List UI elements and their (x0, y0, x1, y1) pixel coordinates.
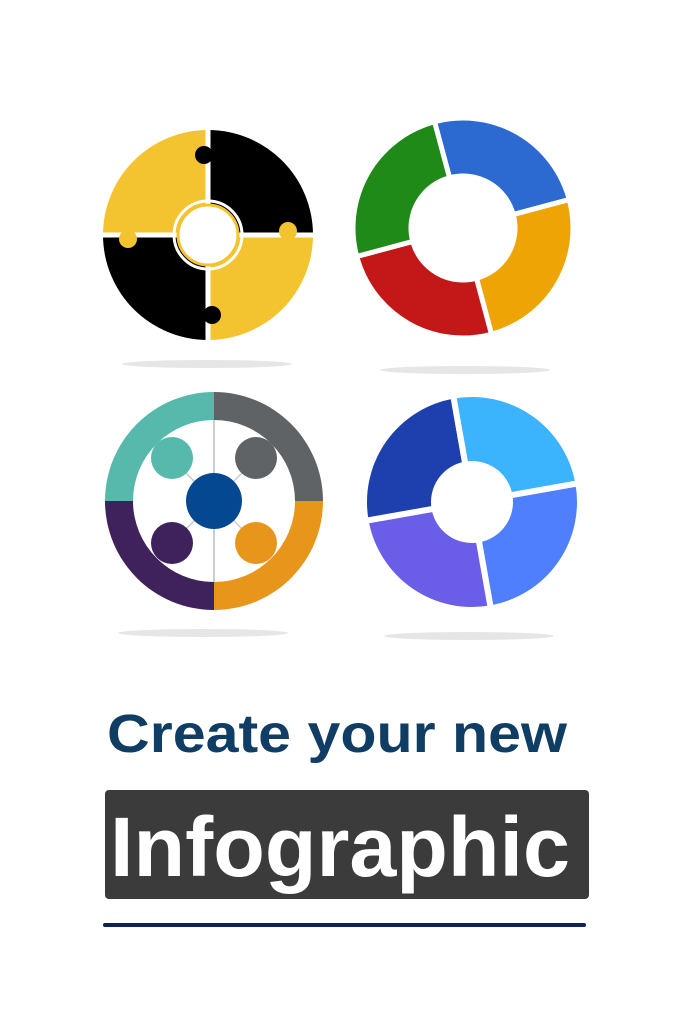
graphic 2: colored pinwheel with gray shadows (308, 73, 618, 383)
title box: Infographic: Infographic (110, 800, 570, 894)
shadows (118, 360, 554, 640)
graphic 4: blue swirl (347, 377, 597, 627)
graphic 1: puzzle circle yellow/black (102, 129, 314, 341)
heading: Create your new: Create your new (107, 704, 568, 764)
graphic 3: ring with five circles (105, 392, 323, 610)
